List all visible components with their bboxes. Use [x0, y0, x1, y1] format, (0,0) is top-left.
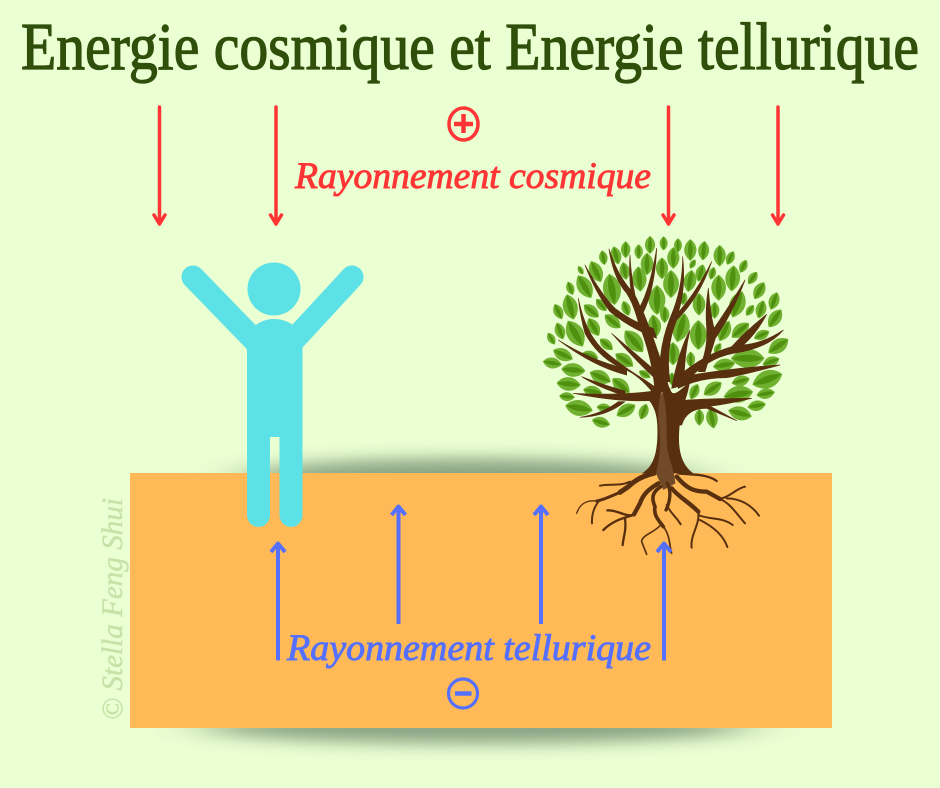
watermark: © Stella Feng Shui [96, 498, 129, 720]
ground panel [130, 473, 832, 728]
tree roots [577, 473, 759, 554]
trunk highlight [656, 392, 675, 490]
icon: plus sign [449, 108, 478, 140]
tree trunk [642, 382, 693, 473]
icon: minus sign [448, 679, 478, 708]
ground shadow: bottom [200, 710, 750, 744]
label: cosmic radiation: Rayonnement cosmique [294, 156, 651, 197]
tree branches [558, 248, 783, 425]
label: telluric radiation: Rayonnement tellurique [286, 628, 651, 669]
icon: person [193, 262, 352, 527]
tree leaves [542, 236, 792, 430]
ground shadow: top [245, 458, 695, 494]
blue arrows: telluric radiation [271, 506, 671, 660]
icon: tree [542, 236, 792, 554]
red arrows: cosmic radiation [154, 107, 784, 224]
